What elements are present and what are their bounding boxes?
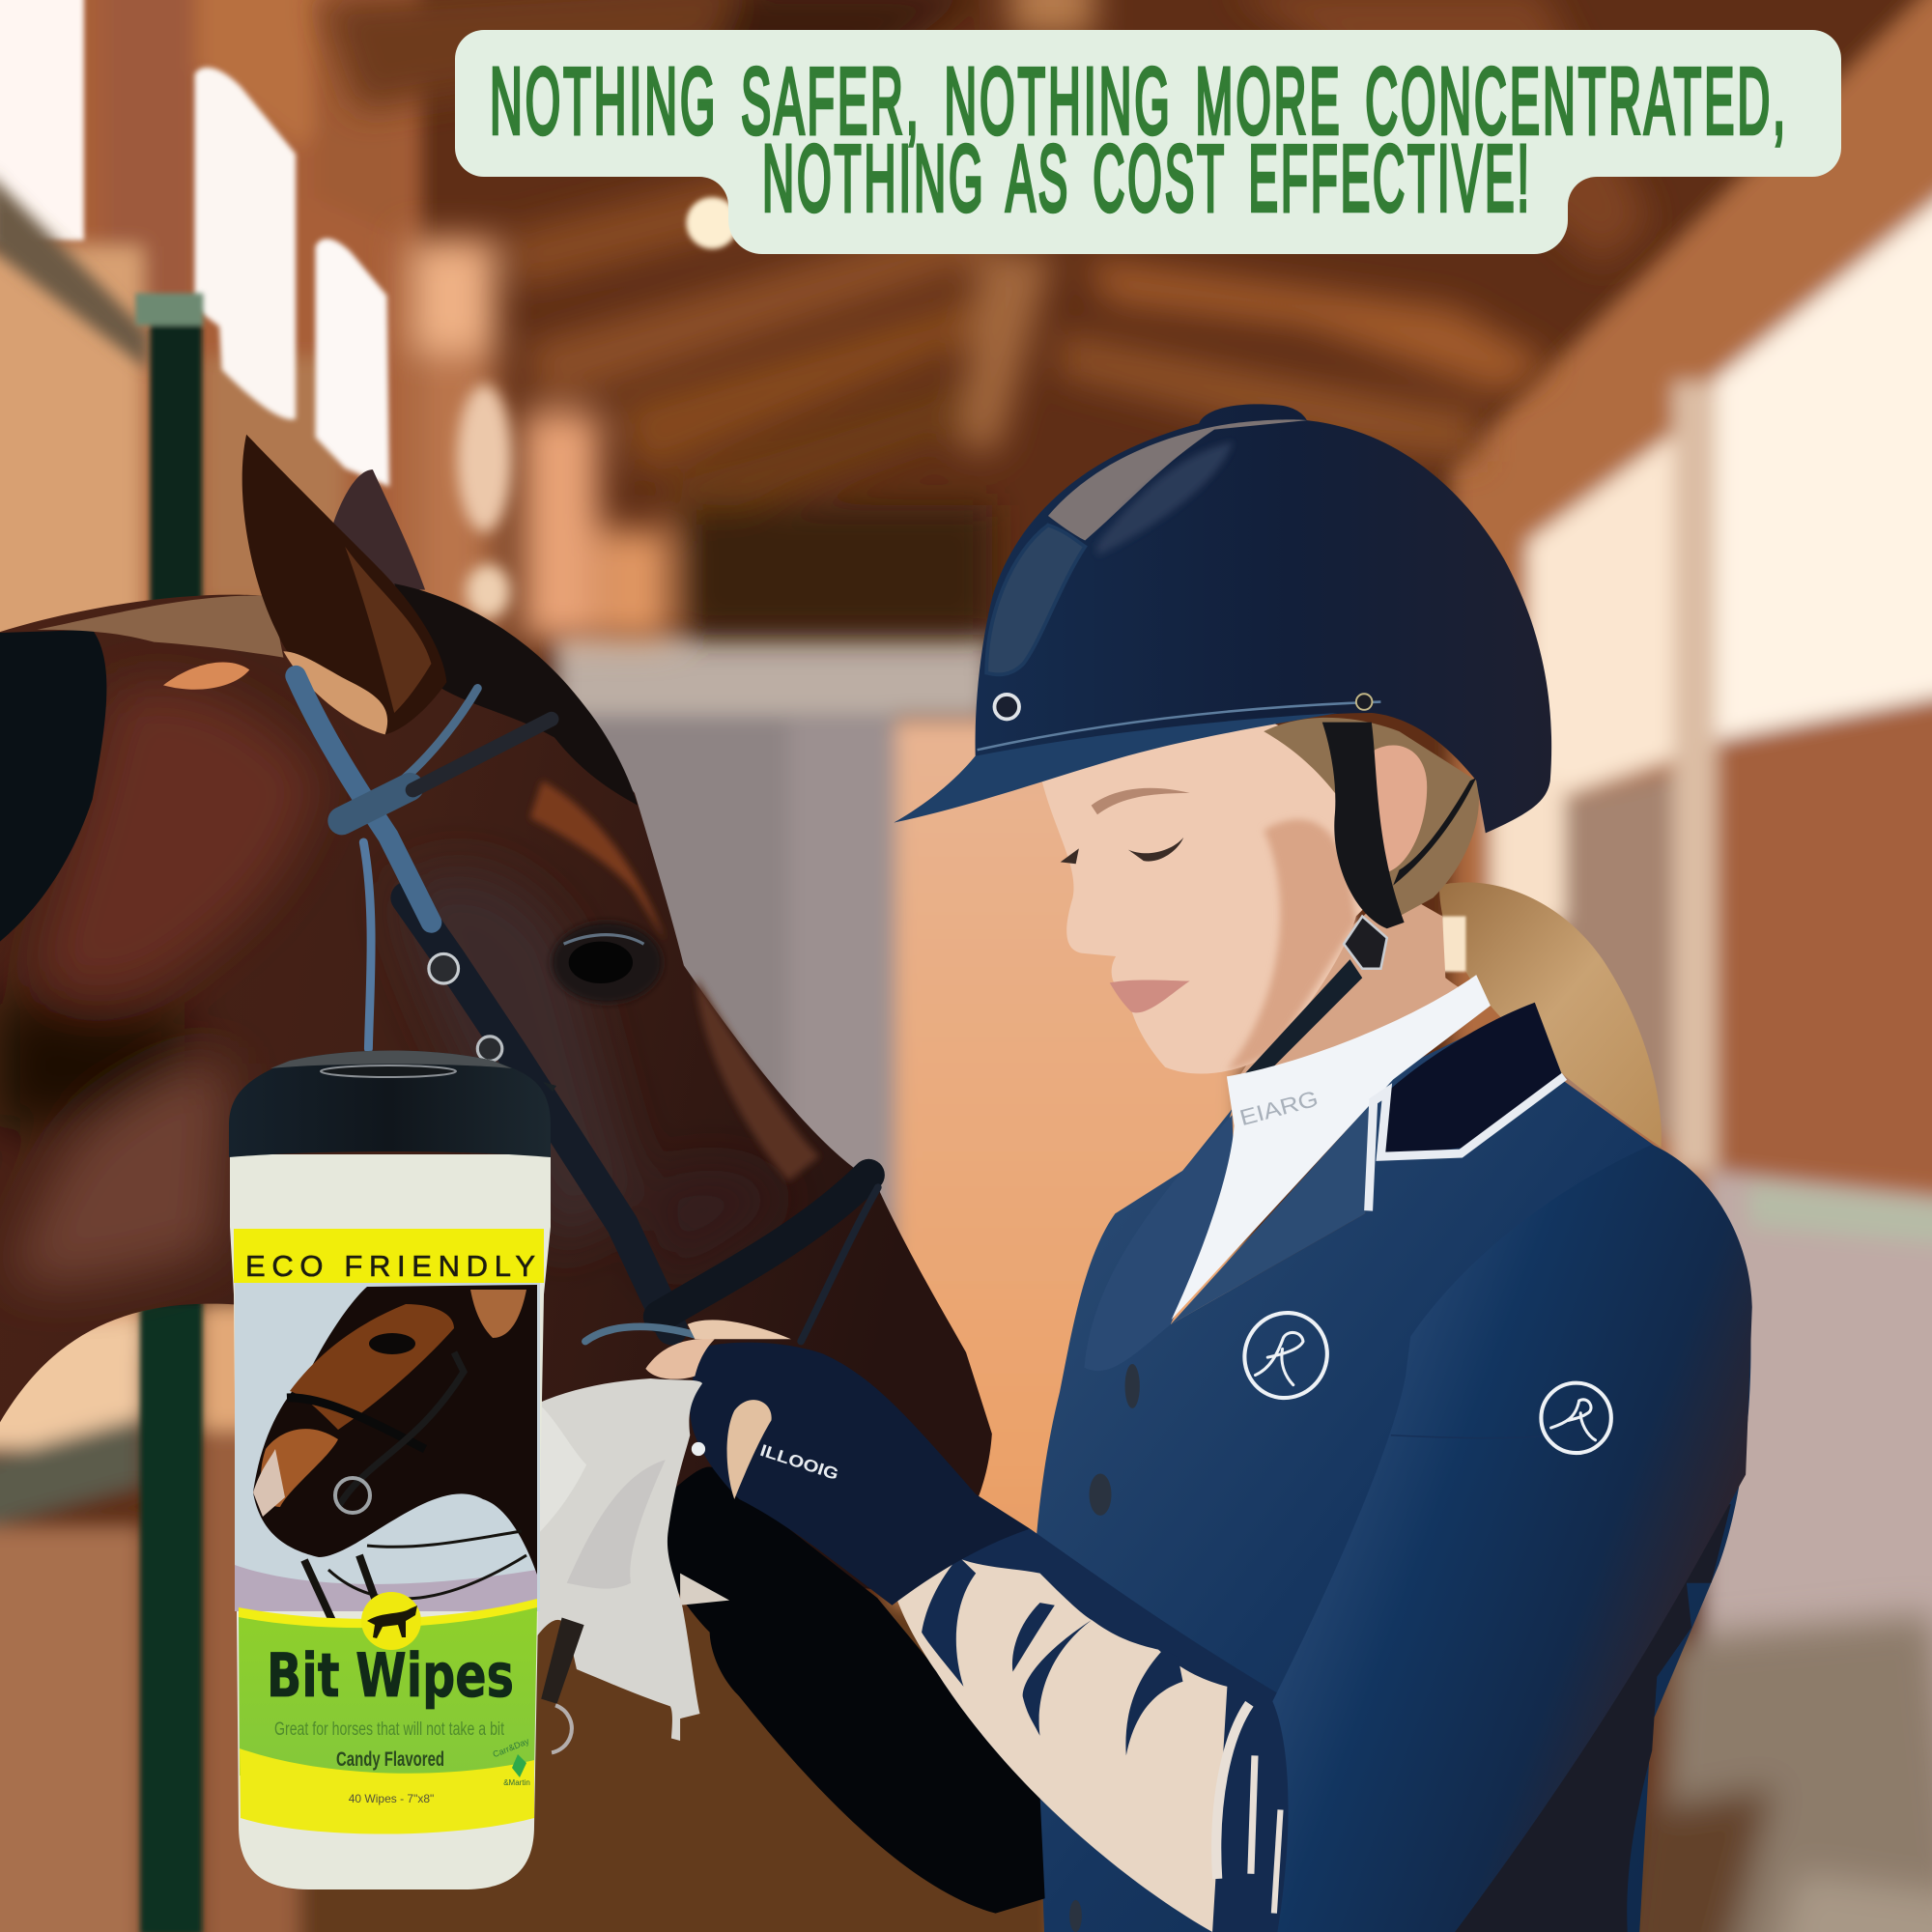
neck [1239,892,1486,1114]
yellow edge [239,1599,537,1628]
helmet logo button [994,695,1019,719]
eye and lips [1128,838,1183,862]
jacket body [1033,1003,1750,1932]
upper arm with logos [1231,1145,1752,1932]
label horse head [253,1285,537,1575]
brand mark: Carr&Day [492,1736,531,1759]
horse forelock [394,583,638,806]
headline callout [455,30,1841,254]
bottle subtitle: Great for horses that will not take a bit [274,1719,505,1740]
left lower [0,1319,142,1448]
sleeve [1272,1145,1752,1932]
left stable windows [0,0,389,487]
face [1042,719,1393,1074]
eco friendly band [234,1229,544,1283]
brand mark [492,1736,531,1787]
chest logo [1231,1299,1341,1411]
horse head and neck [0,435,992,1589]
helmet [895,404,1551,833]
cloth [536,1378,702,1741]
helmet vent mesh [986,526,1085,674]
sleeve logo [1541,1383,1611,1453]
shirt and velvet collar [1172,975,1564,1320]
jacket lapel [1171,1103,1372,1324]
bridle buckles [429,953,459,983]
center [894,721,1238,1932]
wipes count: 40 Wipes - 7"x8" [349,1792,434,1805]
helmet top light [1048,419,1307,540]
ponytail and head [895,404,1662,1148]
bottle white body [230,1154,551,1889]
eco friendly band: ECO FRIENDLY [245,1249,535,1283]
bridle straps [296,676,878,1342]
sleeve shadow wedges [922,1556,1182,1755]
rider [516,404,1752,1932]
horse eye [552,922,663,1003]
horse coat highlights [0,687,788,1283]
label green panel [239,1605,537,1776]
right wall [1454,0,1932,1233]
horse forehead and nose glow [530,781,819,1181]
ceiling lamp glow [686,197,738,249]
lower yellow band [240,1748,534,1833]
product bottle: Bit Wipes [229,1051,556,1889]
jacket buttons [1069,1364,1140,1932]
sleeve light slivers [1216,1704,1281,1914]
forearm sleeve [892,1529,1301,1932]
dark undershirt side [1406,1504,1731,1932]
green stall post [135,294,203,1932]
rein and ring [541,1617,584,1704]
arms, glove, cloth [516,1320,1301,1932]
bit wipes title: Bit Wipes [267,1640,514,1711]
brand mark: &Martin [503,1778,530,1787]
callout bubble [455,30,1841,254]
horse [0,435,992,1589]
helmet straps [1322,723,1405,928]
hand [645,1339,715,1379]
horse near ear [242,435,446,734]
glove [690,1343,1030,1605]
lower dark arm [645,1467,1045,1914]
collar embroidery: EIARG [1236,1086,1321,1130]
label horse badge [361,1592,421,1650]
left wall [0,0,419,653]
ear [1366,746,1427,873]
horse far ear [332,469,425,589]
candy flavored: Candy Flavored [336,1748,444,1771]
glove wordmark: ILLOOIG [757,1440,841,1484]
right lower wall [1707,1171,1932,1932]
bottle cap [229,1051,556,1157]
horse mane [0,630,106,944]
gap behind neck [1441,917,1465,972]
bottle label photo [235,1283,540,1623]
hair at temple [1264,718,1479,917]
sunlit sleeve [892,1556,1227,1932]
